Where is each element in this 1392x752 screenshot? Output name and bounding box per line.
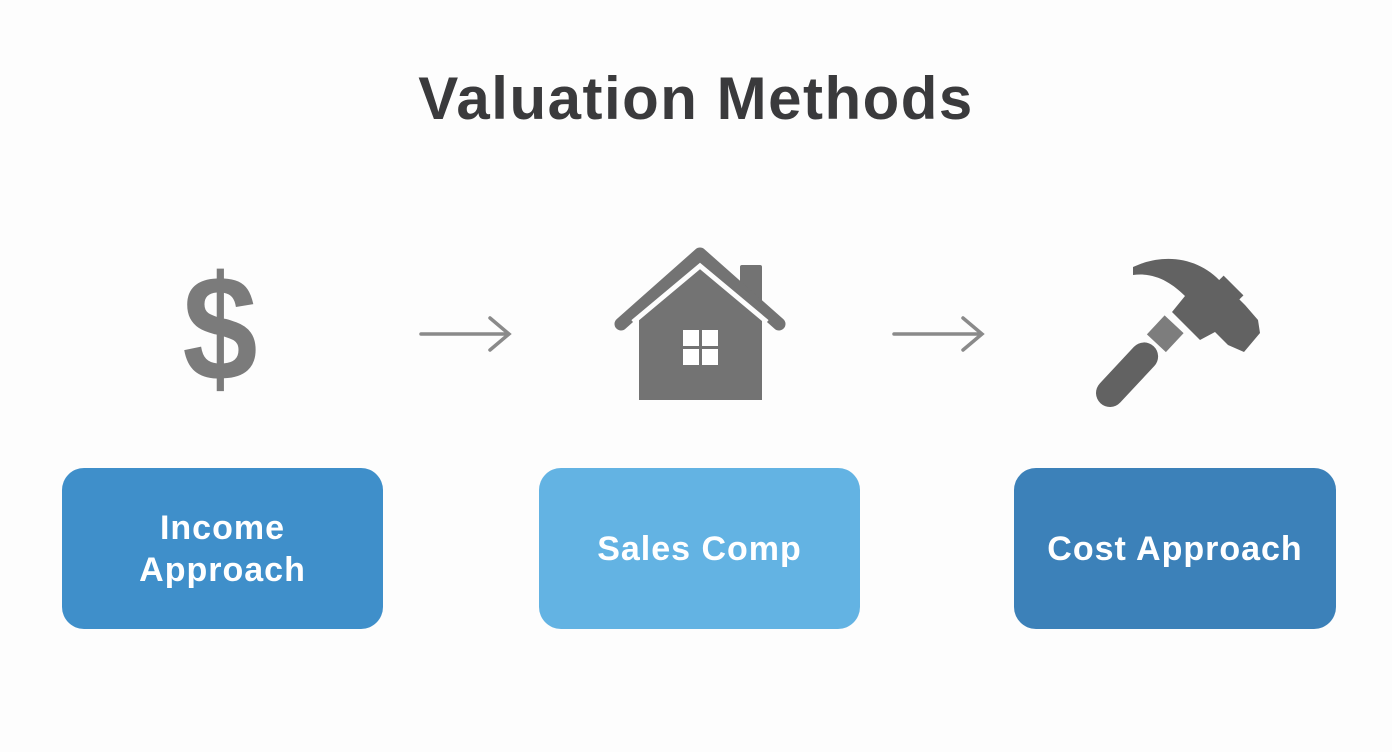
box: Income Approach [62, 468, 383, 629]
title: Valuation Methods [418, 65, 974, 132]
box: Sales Comp: Sales Comp [597, 530, 802, 568]
box: Cost Approach [1014, 468, 1336, 629]
box: Cost Approach: Cost Approach [1047, 530, 1303, 568]
icon: hammer [1090, 259, 1260, 413]
box: Sales Comp [539, 468, 860, 629]
icon: dollar sign: $ [182, 245, 258, 413]
icon: house [621, 254, 779, 400]
arrow 1 [421, 318, 509, 350]
arrow 2 [894, 318, 982, 350]
box: Income Approach: Income [160, 508, 285, 546]
box: Income Approach: Approach [139, 550, 306, 588]
